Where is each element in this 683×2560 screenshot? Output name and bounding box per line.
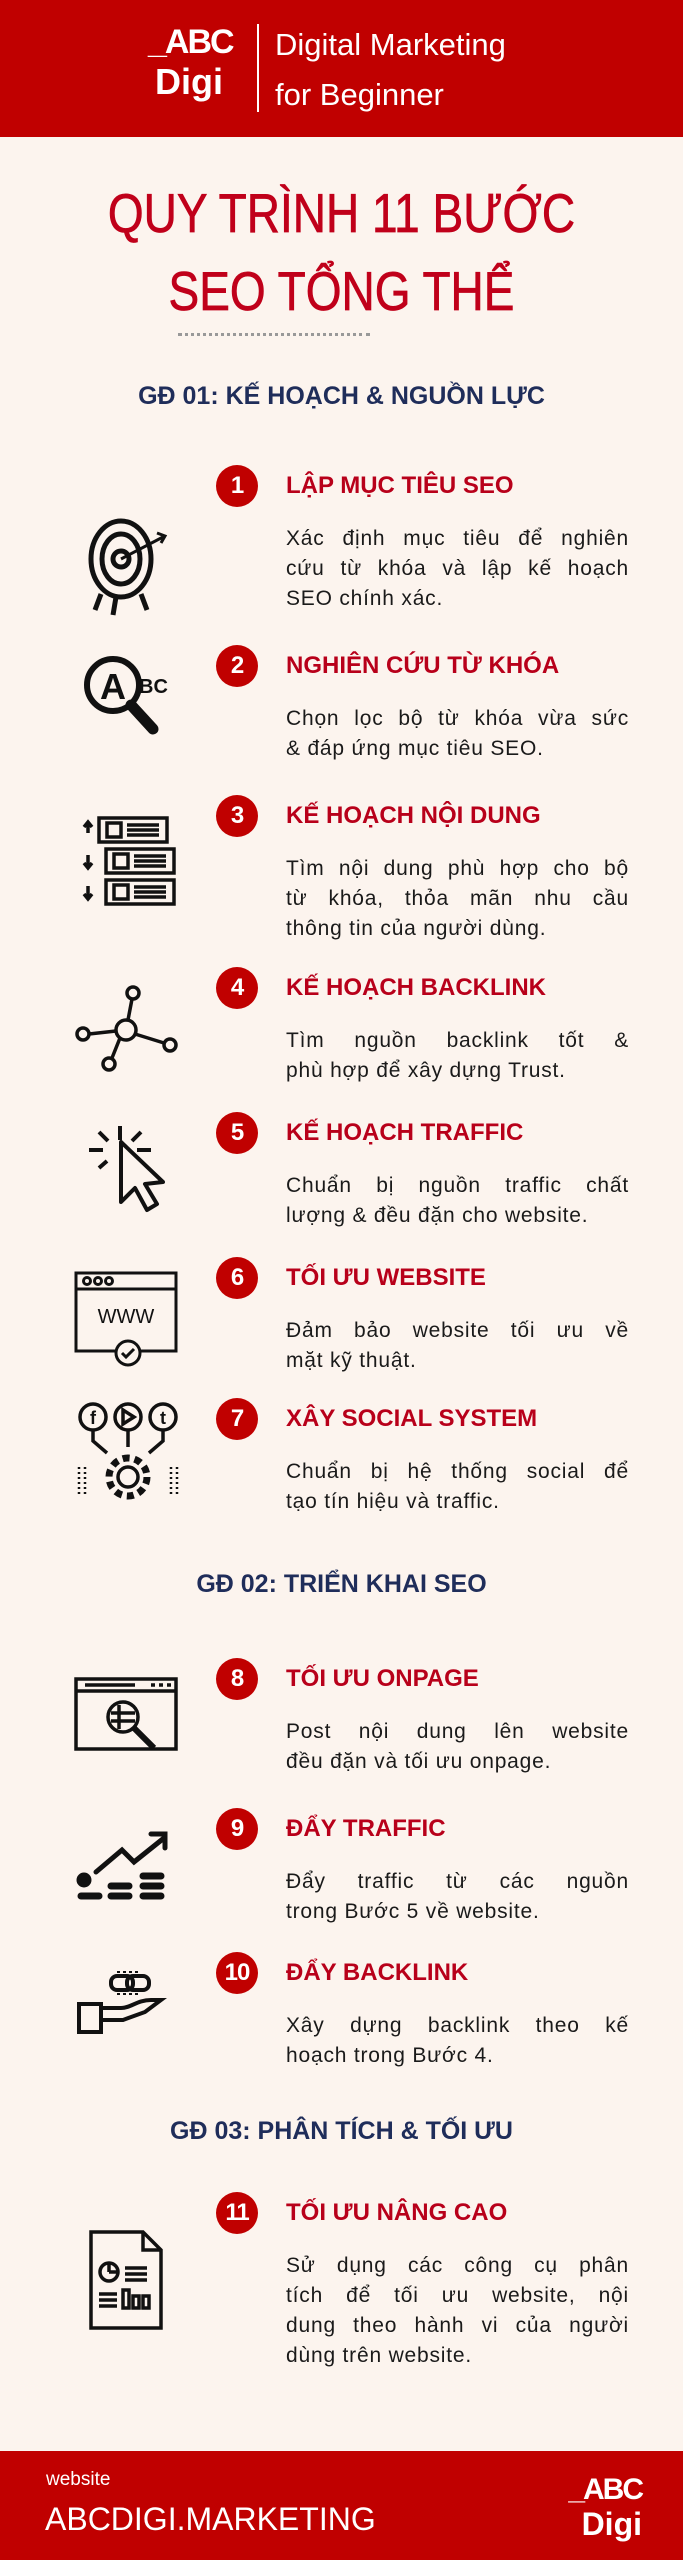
logo: Digi [155, 61, 223, 102]
step 8 [74, 1658, 629, 1773]
step 7: Chuẩn bị hệ thống social để [286, 1460, 629, 1483]
step 10: hoạch trong Bước 4. [286, 2044, 494, 2067]
footer logo: Digi [582, 2506, 642, 2542]
footer logo [568, 2473, 644, 2542]
icon: report document [89, 2230, 163, 2330]
step 4 [75, 967, 629, 1082]
step 8: TỐI ƯU ONPAGE [286, 1665, 479, 1692]
step 10: 10 [225, 1959, 249, 1986]
icon: target [88, 518, 168, 616]
step 9: trong Bước 5 về website. [286, 1900, 540, 1923]
heading: GĐ 02: GĐ 02: TRIỂN KHAI SEO [196, 1570, 487, 1598]
step 1: cứu từ khóa và lập kế hoạch [286, 557, 629, 580]
step 5: lượng & đều đặn cho website. [286, 1204, 588, 1227]
step 7: 7 [231, 1405, 243, 1432]
title: QUY TRÌNH 11 BƯỚC [108, 182, 575, 244]
step 1: LẬP MỤC TIÊU SEO [286, 472, 514, 499]
step 4: 4 [231, 974, 243, 1001]
icon: social gear: f [90, 1408, 97, 1428]
step 4: Tìm nguồn backlink tốt & [286, 1029, 629, 1052]
header tagline [275, 27, 506, 112]
step 11: dung theo hành vi của người [286, 2314, 629, 2337]
footer website label: website [46, 2469, 110, 2490]
step 5: 5 [231, 1119, 243, 1146]
step 5: Chuẩn bị nguồn traffic chất [286, 1174, 629, 1197]
icon: www window: WWW [98, 1306, 154, 1328]
step 8: 8 [231, 1665, 243, 1692]
icon: browser search [74, 1677, 178, 1751]
step 1: Xác định mục tiêu để nghiên [286, 527, 629, 550]
footer logo: _ABC [568, 2473, 642, 2506]
step 6 [74, 1257, 629, 1372]
icon: social gear [78, 1402, 178, 1500]
step 3: từ khóa, thỏa mãn nhu cầu [286, 887, 629, 910]
step 7: XÂY SOCIAL SYSTEM [286, 1405, 537, 1432]
step 10: Xây dựng backlink theo kế [286, 2014, 629, 2037]
step 3: 3 [231, 802, 243, 829]
footer bar [0, 2451, 683, 2560]
step 11 [89, 2192, 629, 2367]
step 2: & đáp ứng mục tiêu SEO. [286, 737, 544, 760]
step 1 [88, 465, 629, 616]
title: SEO TỔNG THỂ [169, 260, 514, 322]
step 3: thông tin của người dùng. [286, 917, 546, 940]
step 11: tích để tối ưu website, nội [286, 2284, 629, 2307]
icon: growth chart [76, 1832, 168, 1900]
icon: cursor click [89, 1126, 165, 1212]
step 5 [89, 1112, 629, 1227]
step 7: tạo tín hiệu và traffic. [286, 1490, 500, 1513]
step 11: TỐI ƯU NÂNG CAO [286, 2199, 507, 2226]
step 9: ĐẨY TRAFFIC [286, 1815, 446, 1842]
step 11: 11 [225, 2199, 249, 2226]
header tagline: for Beginner [275, 77, 444, 112]
step 6: TỐI ƯU WEBSITE [286, 1264, 486, 1291]
step 2: NGHIÊN CỨU TỪ KHÓA [286, 652, 559, 679]
header bar [0, 0, 683, 137]
header tagline: Digital Marketing [275, 27, 506, 62]
step 5: KẾ HOẠCH TRAFFIC [286, 1119, 523, 1146]
step 8: Post nội dung lên website [286, 1720, 629, 1743]
icon: magnifier ABC [84, 656, 168, 734]
step 4: KẾ HOẠCH BACKLINK [286, 974, 546, 1001]
icon: magnifier ABC: BC [139, 676, 168, 698]
step 2: Chọn lọc bộ từ khóa vừa sức [286, 707, 629, 730]
title [108, 182, 575, 322]
step 6: mặt kỹ thuật. [286, 1349, 417, 1372]
icon: network [75, 985, 178, 1072]
icon: content list [82, 816, 176, 906]
step 10 [77, 1952, 629, 2067]
step 11: Sử dụng các công cụ phân [286, 2254, 629, 2277]
step 3: Tìm nội dung phù hợp cho bộ [286, 857, 629, 880]
step 1: SEO chính xác. [286, 587, 443, 610]
step 8: đều đặn và tối ưu onpage. [286, 1750, 551, 1773]
step 11: dùng trên website. [286, 2344, 472, 2367]
icon: social gear: t [160, 1408, 166, 1428]
step 2 [84, 645, 629, 760]
step 10: ĐẨY BACKLINK [286, 1959, 468, 1986]
step 6: Đảm bảo website tối ưu về [286, 1319, 629, 1342]
step 1: 1 [231, 472, 243, 499]
logo: _ABC [148, 23, 233, 61]
step 2: 2 [231, 652, 243, 679]
icon: magnifier ABC: A [100, 666, 126, 707]
footer url: ABCDIGI.MARKETING [45, 2501, 376, 2537]
step 9 [76, 1808, 629, 1923]
icon: hand with chain [77, 1971, 167, 2034]
heading: GĐ 03: GĐ 03: PHÂN TÍCH & TỐI ƯU [170, 2117, 513, 2145]
step 6: 6 [231, 1264, 243, 1291]
step 3: KẾ HOẠCH NỘI DUNG [286, 802, 541, 829]
step 3 [82, 795, 629, 940]
step 9: Đẩy traffic từ các nguồn [286, 1870, 629, 1893]
logo [148, 23, 234, 102]
icon: www window [74, 1272, 178, 1366]
step 9: 9 [231, 1815, 243, 1842]
step 7 [78, 1398, 629, 1513]
heading: GĐ 01: GĐ 01: KẾ HOẠCH & NGUỒN LỰC [138, 382, 545, 410]
step 4: phù hợp để xây dựng Trust. [286, 1059, 566, 1082]
